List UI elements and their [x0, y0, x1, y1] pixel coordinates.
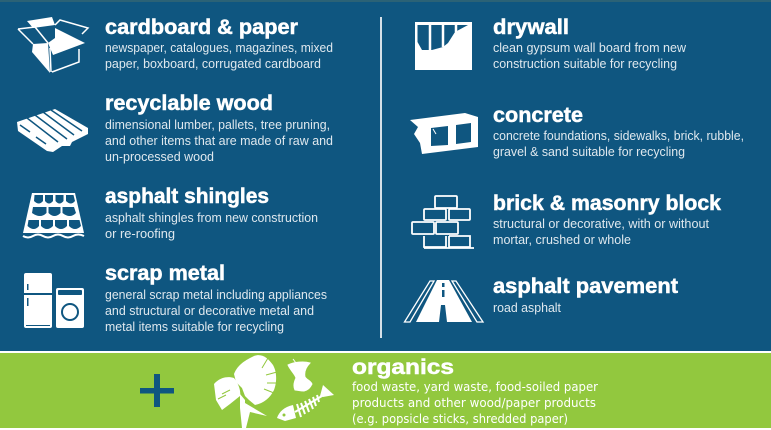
- icon: wooden pallet: [17, 109, 88, 152]
- text: cardboard & paper description: paper, boxboard, corrugated cardboard: [105, 57, 321, 71]
- text: brick & masonry description: structural or decorative, with or without: [493, 217, 710, 231]
- text: scrap metal description: metal items suitable for recycling: [105, 320, 284, 334]
- icon: apple core: [288, 359, 312, 391]
- icon: plus sign: [140, 374, 174, 407]
- icon: road: [404, 280, 483, 322]
- text: brick & masonry description: [493, 217, 710, 247]
- heading: asphalt shingles: asphalt shingles: [105, 185, 269, 208]
- text: concrete description: [493, 129, 744, 159]
- text: organics description: (e.g. popsicle sticks, shredded paper): [352, 411, 568, 426]
- heading: drywall: drywall: [493, 16, 569, 39]
- icon: monstera leaf: [214, 355, 278, 428]
- text: recyclable wood description: [105, 118, 333, 164]
- icon: cardboard box: [18, 17, 88, 73]
- text: concrete description: concrete foundations, sidewalks, brick, rubble,: [493, 129, 744, 143]
- heading: concrete: concrete: [493, 104, 583, 127]
- text: recyclable wood description: and other items that are made of raw and: [105, 134, 333, 148]
- text: drywall description: construction suitable for recycling: [493, 57, 677, 71]
- text: asphalt shingles description: asphalt shingles from new construction: [105, 211, 318, 225]
- heading: recyclable wood: recyclable wood: [105, 92, 273, 115]
- heading: scrap metal: scrap metal: [105, 262, 225, 285]
- heading: brick & masonry block: brick & masonry block: [493, 192, 721, 215]
- text: asphalt pavement description: road asphalt: [493, 301, 562, 315]
- text: concrete description: gravel & sand suitable for recycling: [493, 145, 685, 159]
- text: recyclable wood description: dimensional lumber, pallets, tree pruning,: [105, 118, 330, 132]
- text: scrap metal description: [105, 288, 327, 334]
- icon: concrete block: [410, 113, 478, 154]
- text: recyclable wood description: un-processed wood: [105, 150, 214, 164]
- text: asphalt shingles description: or re-roofing: [105, 227, 175, 241]
- heading: asphalt pavement: asphalt pavement: [493, 275, 678, 298]
- text: organics description: food waste, yard waste, food-soiled paper: [352, 379, 599, 394]
- text: scrap metal description: and structural or decorative metal and: [105, 304, 314, 318]
- heading: organics: organics: [352, 356, 454, 379]
- icon: fish bone: [277, 385, 334, 421]
- text: drywall description: [493, 41, 687, 71]
- text: asphalt shingles description: [105, 211, 318, 241]
- text: cardboard & paper description: newspaper, catalogues, magazines, mixed: [105, 41, 333, 55]
- icon: drywall: [415, 22, 472, 70]
- heading: cardboard & paper: cardboard & paper: [105, 16, 298, 39]
- text: drywall description: clean gypsum wall board from new: [493, 41, 687, 55]
- icon: brick wall: [412, 196, 474, 248]
- icon: fridge and washer: [24, 273, 84, 328]
- text: cardboard & paper description: [105, 41, 333, 71]
- icon: asphalt shingles: [23, 193, 84, 238]
- text: organics description: products and other wood/paper products: [352, 395, 596, 410]
- text: organics description: [352, 379, 599, 426]
- panel: organics: [0, 353, 771, 428]
- text: scrap metal description: general scrap metal including appliances: [105, 288, 327, 302]
- text: brick & masonry description: mortar, crushed or whole: [493, 233, 631, 247]
